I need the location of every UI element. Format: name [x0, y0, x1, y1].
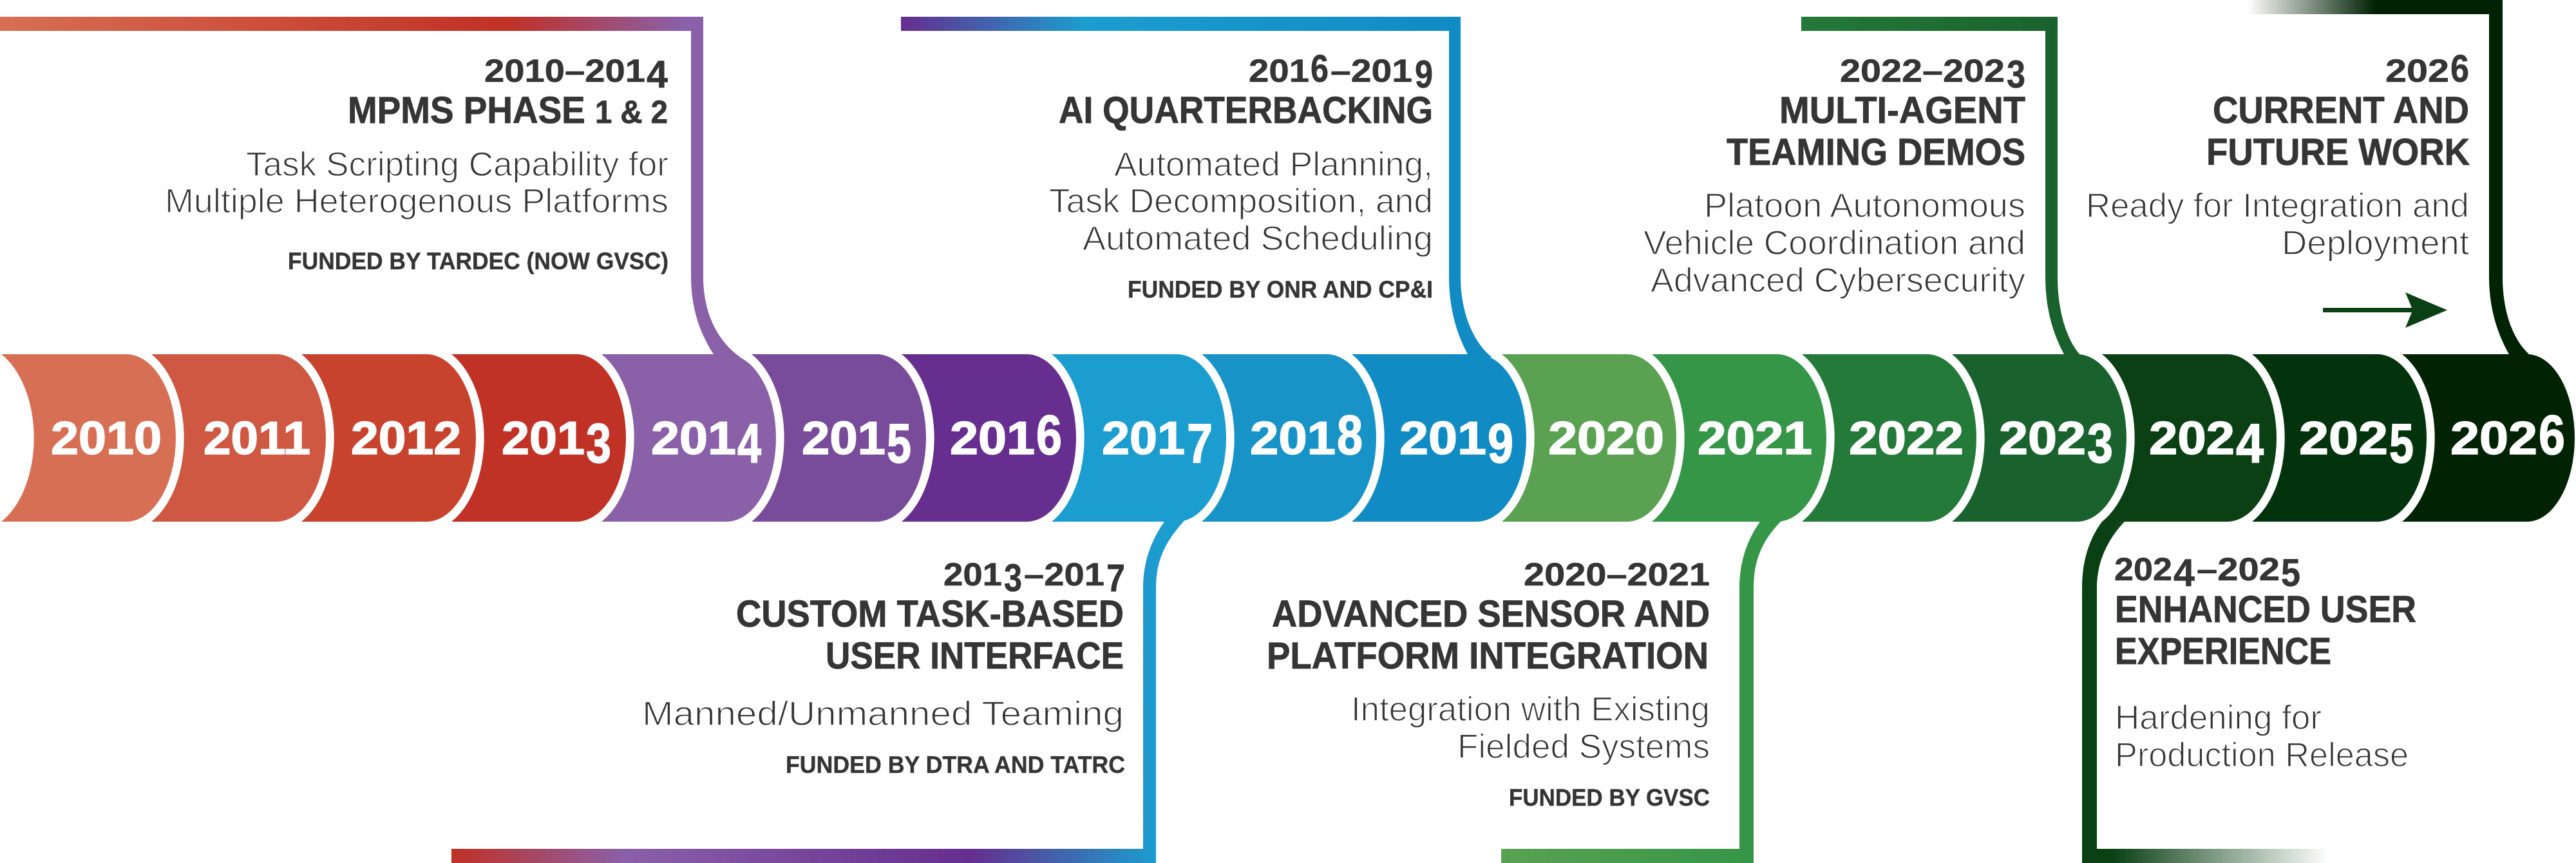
- panel: 2026 Current and Future Work: [2086, 0, 2529, 354]
- date range: 2010–201: [484, 53, 645, 89]
- year segment: 2010: [1, 354, 176, 522]
- connector: green bracket: [1801, 17, 2083, 357]
- year segment: 2011: 2011: [204, 413, 310, 464]
- description: [1351, 690, 1710, 766]
- connector: red to purple bracket: [0, 17, 741, 357]
- year segment: 2013: 3: [586, 413, 611, 475]
- date range: 4: [647, 53, 668, 96]
- year segment: 2012: [301, 354, 476, 522]
- heading: [1267, 593, 1710, 677]
- year segment: 2023: [1952, 354, 2126, 522]
- year segment: 2021: 2021: [1698, 413, 1812, 464]
- heading: [2206, 90, 2470, 173]
- year segment: 2023: 202: [1999, 413, 2086, 464]
- year segment: 2023: 3: [2087, 413, 2113, 475]
- description: [1643, 187, 2026, 299]
- date range: [943, 556, 1125, 600]
- year segment: 2024: 4: [2236, 413, 2264, 475]
- date range: 201: [943, 556, 1002, 593]
- year segment: 2017: 201: [1102, 413, 1185, 464]
- date range: 201: [1249, 53, 1309, 89]
- heading: MPMS PHASE 1 & 2: [348, 90, 668, 131]
- year segment: 2024: 202: [2149, 413, 2235, 464]
- description: [2086, 187, 2469, 262]
- connector: fading dark green bracket: [2247, 0, 2529, 354]
- date range: –201: [1331, 53, 1412, 89]
- date range: 5: [2281, 551, 2300, 594]
- date range: 2020–2021: [1524, 556, 1710, 593]
- panel: 2024–2025 Enhanced User Experience: [2082, 522, 2416, 863]
- panel: 2016–2019 AI Quarterbacking: [901, 17, 1492, 357]
- year segment: 2011: [151, 354, 326, 522]
- description: Task Decomposition, and: [1049, 182, 1433, 220]
- heading: [736, 593, 1124, 677]
- description: Vehicle Coordination and: [1643, 224, 2025, 262]
- panel: 2022–2023 Multi-Agent Teaming Demos: [1643, 17, 2083, 357]
- heading: TEAMING DEMOS: [1727, 131, 2025, 173]
- description: Production Release: [2115, 736, 2409, 774]
- description: [165, 146, 668, 220]
- year segment: 2026: [2402, 354, 2575, 522]
- description: Automated Scheduling: [1083, 220, 1433, 258]
- panel: 2020–2021 Advanced Sensor and Platform Integration: [1267, 519, 1783, 863]
- year segment: 2017: [1052, 354, 1226, 522]
- year segment: 2026: 202: [2450, 413, 2537, 464]
- funding note: FUNDED BY GVSC: [1509, 784, 1710, 811]
- description: Advanced Cybersecurity: [1651, 261, 2026, 299]
- year segment: 2024: [2102, 354, 2277, 522]
- year segment: 2013: [451, 354, 626, 522]
- date range: 7: [1106, 556, 1125, 600]
- year segment: 2020: 2020: [1548, 413, 1664, 464]
- connector: green bracket: [1501, 519, 1783, 863]
- year segment: 2018: [1202, 354, 1376, 522]
- date range: 3: [2007, 53, 2025, 96]
- funding note: FUNDED BY ONR AND CP&I: [1128, 276, 1433, 303]
- year segment: 2025: 202: [2299, 413, 2388, 464]
- date range: 2022–202: [1840, 53, 2005, 89]
- date range: [484, 53, 668, 96]
- date range: 3: [1004, 556, 1022, 600]
- date range: 9: [1415, 53, 1433, 96]
- year segment: 2022: 2022: [1849, 413, 1964, 464]
- heading: FUTURE WORK: [2206, 131, 2470, 173]
- funding note: FUNDED BY DTRA AND TATRC: [786, 752, 1125, 778]
- year segment: 2025: 5: [2389, 413, 2414, 475]
- year segment: 2016: 6: [1036, 404, 1062, 466]
- description: Fielded Systems: [1457, 728, 1710, 766]
- heading: [1727, 90, 2025, 173]
- heading: [2115, 589, 2416, 672]
- description: Deployment: [2282, 224, 2469, 262]
- description: Ready for Integration and: [2086, 187, 2469, 225]
- year segment: 2019: 201: [1399, 413, 1486, 464]
- year segment: 2014: 4: [737, 413, 761, 475]
- year segment: 2025: [2252, 354, 2427, 522]
- date range: 6: [1311, 47, 1329, 90]
- description: Integration with Existing: [1351, 690, 1710, 728]
- year segment: 2016: [902, 354, 1076, 522]
- date range: [2114, 551, 2300, 594]
- heading: AI QUARTERBACKING: [1059, 90, 1433, 131]
- description: Platoon Autonomous: [1704, 187, 2025, 225]
- year segment: 2021: [1652, 354, 1826, 522]
- description: [2115, 699, 2409, 774]
- year segment: 2019: 9: [1488, 413, 1513, 475]
- year segment: 2010: 2010: [51, 413, 162, 464]
- year segment: 2017: 7: [1187, 413, 1213, 475]
- date range: 4: [2174, 551, 2195, 594]
- year segment: 2014: 201: [651, 413, 736, 464]
- heading: USER INTERFACE: [826, 635, 1124, 677]
- heading: PLATFORM INTEGRATION: [1267, 635, 1709, 677]
- date: 202: [2385, 53, 2449, 89]
- heading: MULTI-AGENT: [1779, 90, 2025, 131]
- year segment: 2012: 2012: [351, 413, 461, 464]
- heading: EXPERIENCE: [2115, 631, 2331, 672]
- arrow: pointing right to future: [2323, 292, 2447, 328]
- date range: [1249, 47, 1433, 96]
- date: 6: [2450, 47, 2469, 90]
- year segment: 2014: [601, 354, 776, 522]
- connector: purple to blue bracket: [901, 17, 1492, 357]
- description: [1049, 146, 1433, 258]
- year segment: 2015: 5: [887, 413, 911, 475]
- year segment: 2020: [1502, 354, 1676, 522]
- connector: red to blue bracket: [451, 519, 1186, 863]
- date range: [1840, 53, 2025, 96]
- year segment: 2015: 201: [802, 413, 886, 464]
- year segment: 2016: 201: [950, 413, 1035, 464]
- heading: CURRENT AND: [2213, 90, 2469, 131]
- year segment: 2019: [1352, 354, 1526, 522]
- description: Automated Planning,: [1114, 146, 1433, 184]
- date range: –201: [1024, 556, 1104, 593]
- year segment: 2018: 8: [1337, 404, 1363, 466]
- description: Hardening for: [2115, 699, 2322, 737]
- year segment: 2026: 6: [2539, 404, 2565, 466]
- panel: 2013–2017 Custom Task-Based User Interface: [451, 519, 1186, 863]
- year segment: 2022: [1802, 354, 1976, 522]
- heading: ENHANCED USER: [2115, 589, 2416, 631]
- date range: 202: [2114, 551, 2172, 587]
- connector: dark green fading bracket: [2082, 522, 2329, 863]
- heading: CUSTOM TASK-BASED: [736, 593, 1124, 635]
- timeline band: years 2010 to 2026: [1, 354, 2575, 522]
- date: [2385, 47, 2469, 90]
- year segment: 2013: 201: [502, 413, 585, 464]
- panel: 2010–2014 MPMS Phase 1 & 2: [0, 17, 741, 357]
- description: Task Scripting Capability for: [246, 146, 668, 184]
- description: Manned/Unmanned Teaming: [642, 695, 1124, 733]
- heading: ADVANCED SENSOR AND: [1272, 593, 1710, 635]
- year segment: 2015: [752, 354, 926, 522]
- funding note: FUNDED BY TARDEC (NOW GVSC): [288, 248, 668, 274]
- description: Multiple Heterogenous Platforms: [165, 182, 668, 220]
- date range: –202: [2197, 551, 2280, 587]
- year segment: 2018: 201: [1250, 413, 1336, 464]
